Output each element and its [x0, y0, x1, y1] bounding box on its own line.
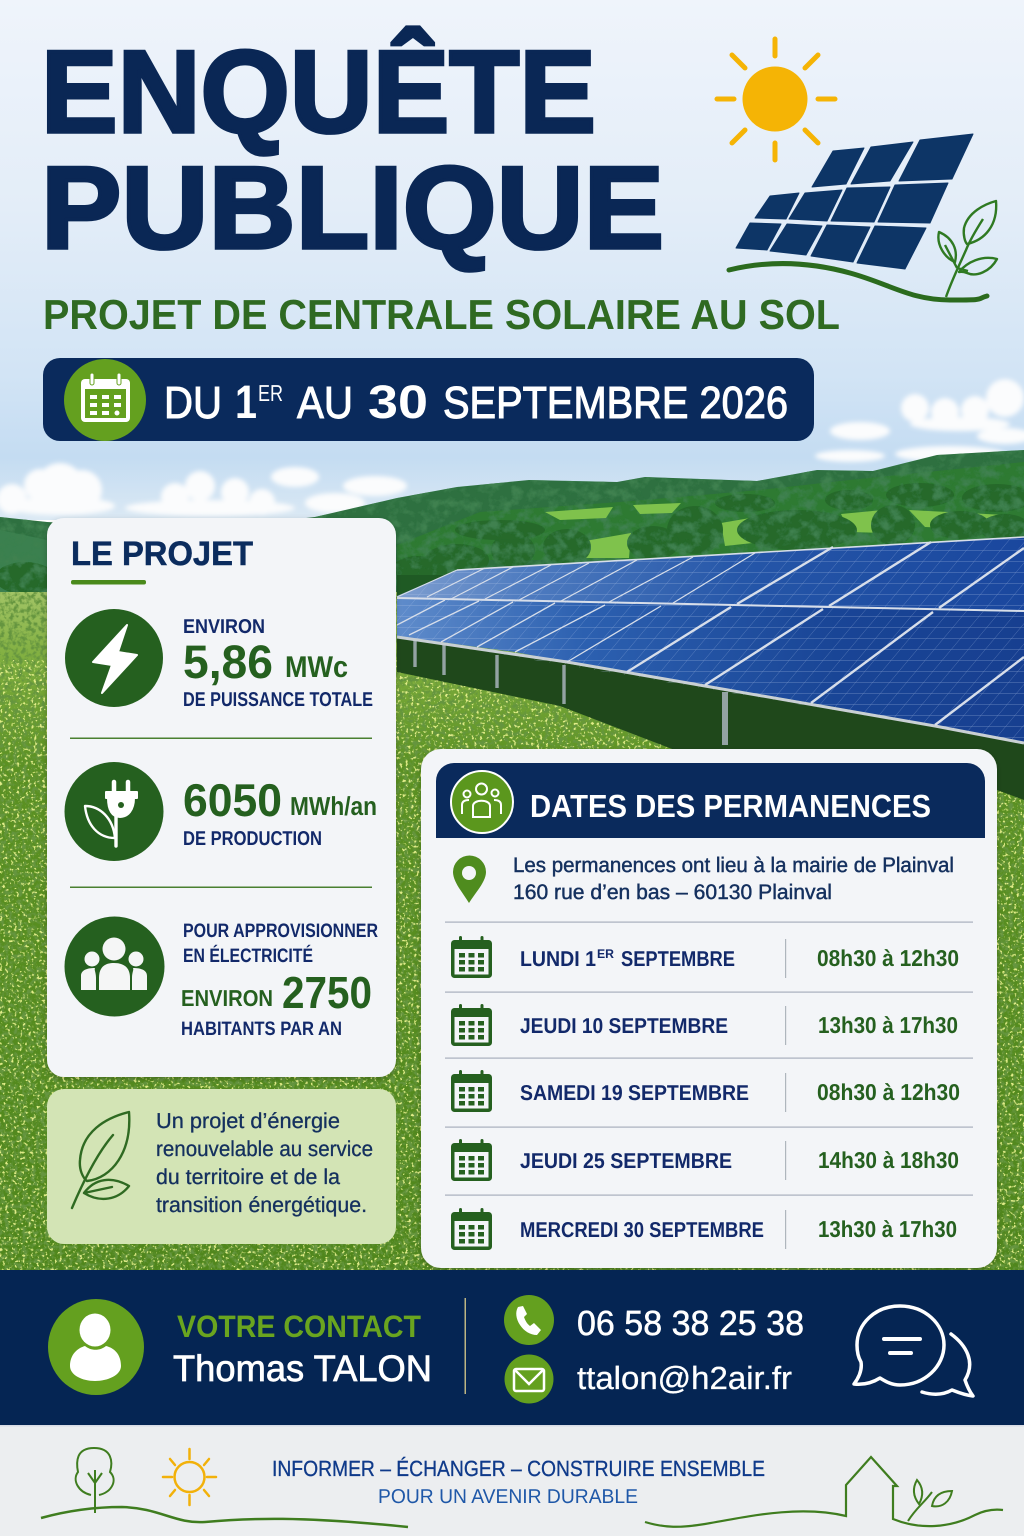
icon: leaf [72, 1112, 129, 1208]
row: samedi 19 septembre: SAMEDI 19 SEPTEMBRE [520, 1081, 749, 1105]
panel: le projet [47, 518, 396, 1077]
title [41, 26, 664, 273]
illustration: tree and hill [41, 1448, 408, 1527]
stat: production: 6050 [183, 774, 282, 826]
stat: homes supplied: 2750 [282, 967, 372, 1018]
slogan: INFORMER – ÉCHANGER – CONSTRUIRE ENSEMBLE [272, 1456, 765, 1481]
panel header: DATES DES PERMANENCES [530, 788, 931, 824]
icon: lightning [65, 609, 163, 707]
phone number: 06 58 38 25 38 [577, 1304, 804, 1343]
stat: power: 5,86 [183, 635, 273, 688]
date text: 1 [235, 375, 257, 428]
stat: power: ENVIRON [183, 616, 265, 638]
stat: homes supplied: EN ÉLECTRICITÉ [183, 944, 313, 967]
contact name: VOTRE CONTACT [177, 1309, 421, 1344]
date text: 30 [368, 375, 428, 428]
heading: le projet: LE PROJET [71, 535, 253, 573]
row: mercredi 30 septembre: 13h30 à 17h30 [818, 1216, 957, 1242]
title: PUBLIQUE [41, 142, 664, 273]
slogan [272, 1456, 765, 1508]
note text [156, 1109, 373, 1217]
stat: homes supplied: HABITANTS PAR AN [181, 1018, 342, 1040]
stat: production: DE PRODUCTION [183, 828, 322, 850]
icon: chat bubbles [854, 1306, 973, 1396]
row: lundi 1er septembre: 08h30 à 12h30 [817, 945, 959, 971]
stat: power: MWc [285, 651, 348, 684]
note text: du territoire et de la [156, 1165, 340, 1189]
illustration: house and plant [645, 1457, 1003, 1527]
stat: power: DE PUISSANCE TOTALE [183, 689, 373, 711]
stat: homes supplied: ENVIRON [181, 985, 273, 1011]
icon: plug with leaf [64, 762, 164, 861]
row: lundi 1er septembre [451, 936, 959, 978]
contact name: Thomas TALON [173, 1348, 432, 1389]
note text: renouvelable au service [156, 1137, 373, 1161]
panel: dates des permanences [421, 749, 997, 1268]
panel: renewable energy note [47, 1089, 396, 1244]
stat: power [183, 616, 373, 711]
contact band [0, 1270, 1024, 1425]
icon: solar panel with plant [729, 134, 997, 300]
row: jeudi 25 septembre: 14h30 à 18h30 [818, 1147, 959, 1173]
icon: group [451, 771, 513, 833]
icon: sun [717, 39, 835, 160]
contact name [173, 1309, 432, 1389]
row: lundi 1er septembre: SEPTEMBRE [621, 947, 735, 971]
date text: SEPTEMBRE 2026 [443, 377, 788, 428]
panel header [436, 763, 985, 838]
row: mercredi 30 septembre [451, 1208, 957, 1250]
icon: person [48, 1299, 144, 1395]
address [513, 854, 954, 904]
row: jeudi 10 septembre: 13h30 à 17h30 [818, 1012, 958, 1038]
row: jeudi 10 septembre: JEUDI 10 SEPTEMBRE [520, 1014, 728, 1038]
icon: mail [504, 1354, 554, 1404]
footer band [0, 1425, 1024, 1536]
date text: AU [297, 377, 353, 428]
row: samedi 19 septembre: 08h30 à 12h30 [817, 1079, 960, 1105]
address: 160 rue d’en bas – 60130 Plainval [513, 881, 832, 904]
address: Les permanences ont lieu à la mairie de Plainval [513, 854, 954, 877]
illustration: sun [163, 1449, 216, 1505]
icon: phone [504, 1295, 554, 1345]
date text: DU [164, 377, 222, 428]
row: mercredi 30 septembre: MERCREDI 30 SEPTEMBRE [520, 1218, 764, 1242]
stat: production [183, 774, 377, 850]
title: ENQUÊTE [41, 26, 596, 157]
date text [164, 375, 788, 428]
row: lundi 1er septembre: LUNDI 1 [520, 947, 596, 971]
row: jeudi 25 septembre [451, 1139, 959, 1181]
date banner [43, 358, 814, 441]
stat: homes supplied: POUR APPROVISIONNER [183, 920, 378, 942]
subtitle: PROJET DE CENTRALE SOLAIRE AU SOL [43, 291, 840, 338]
row: lundi 1er septembre: ER [597, 947, 614, 961]
icon: people [64, 916, 164, 1016]
icon: location pin [453, 856, 486, 903]
row: jeudi 10 septembre [451, 1004, 958, 1046]
note text: Un projet d’énergie [156, 1109, 340, 1133]
email: ttalon@h2air.fr [577, 1360, 792, 1396]
icon: calendar [64, 359, 146, 441]
date text: ER [258, 380, 283, 406]
stat: production: MWh/an [290, 791, 377, 821]
stat: homes supplied [181, 920, 378, 1040]
note text: transition énergétique. [156, 1193, 367, 1217]
slogan: POUR UN AVENIR DURABLE [378, 1486, 638, 1508]
row: samedi 19 septembre [451, 1070, 960, 1112]
row: jeudi 25 septembre: JEUDI 25 SEPTEMBRE [520, 1149, 732, 1173]
